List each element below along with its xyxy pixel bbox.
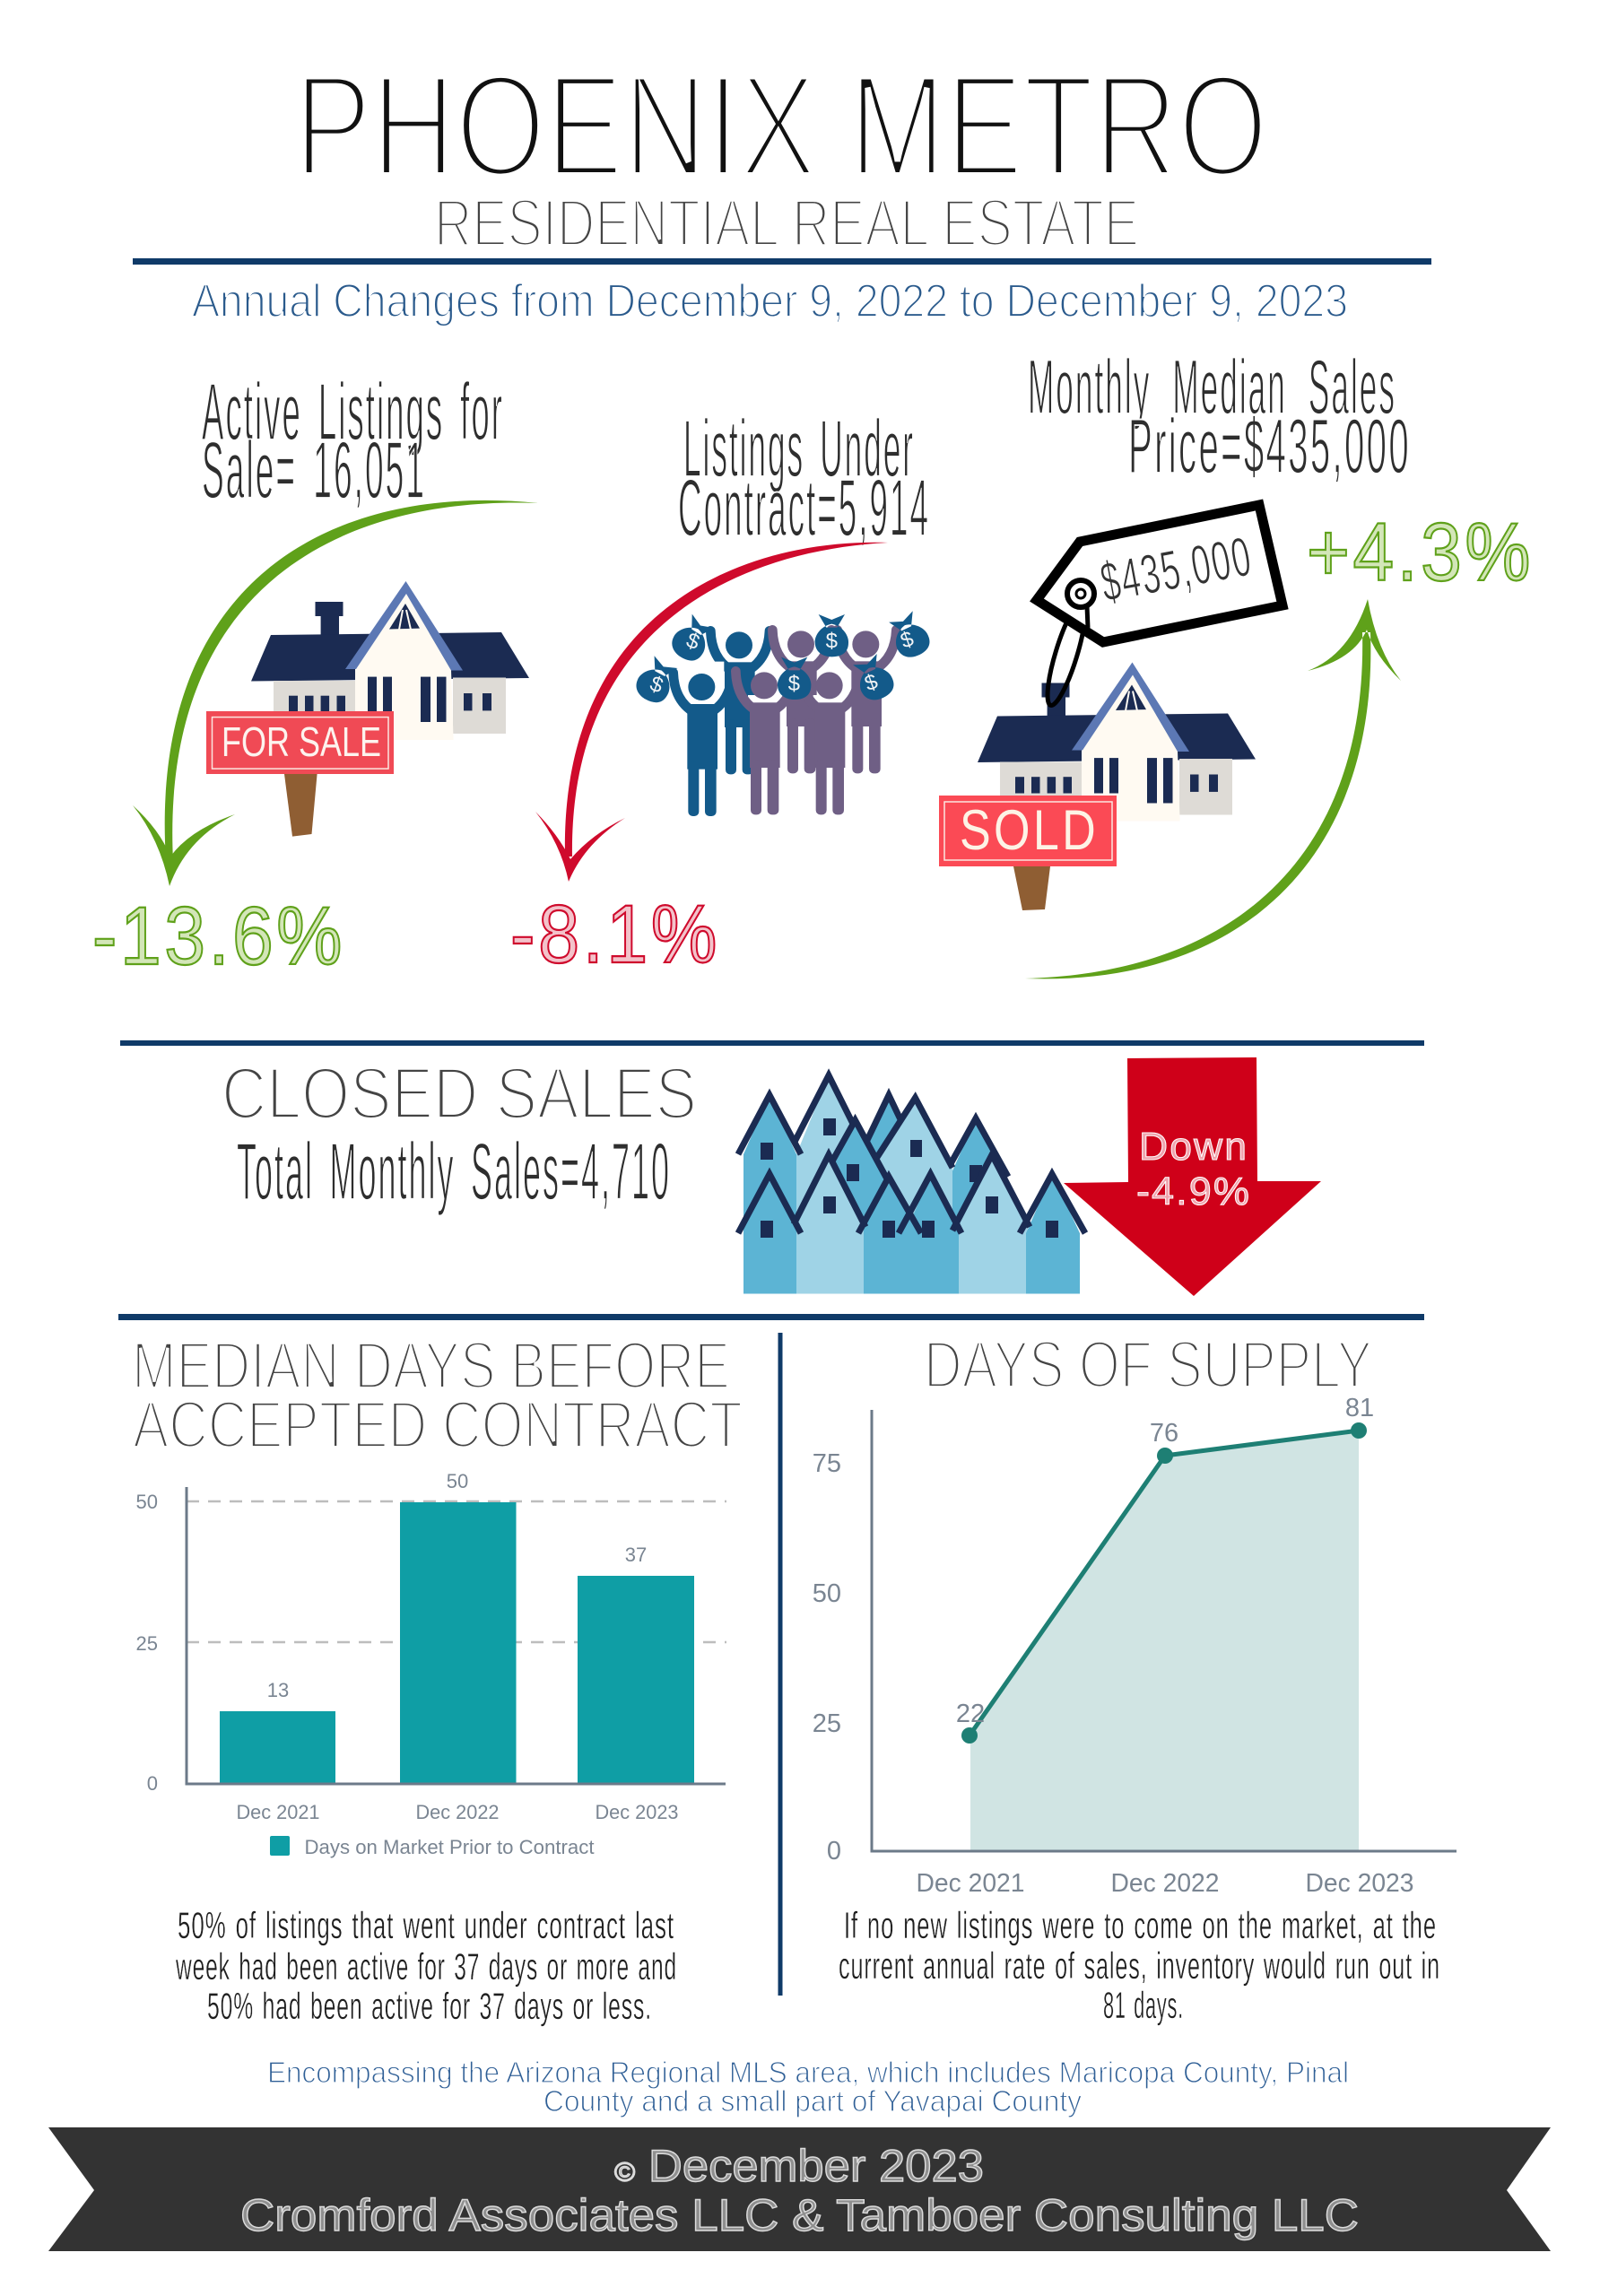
icon: house for sale [206,581,529,837]
icon: price tag: $435,000 [1096,526,1257,614]
title: PHOENIX METRO [294,45,1268,207]
closed sales heading: CLOSED SALES [222,1053,697,1135]
date range subheading: Annual Changes from December 9, 2022 to December 9, 2023 [192,275,1348,327]
bar chart: 25 [136,1632,158,1655]
arrow: green curved up [1025,599,1401,978]
icon: people with money bags: $ [788,672,800,696]
days of supply explanation: 81 days. [1103,1984,1184,2026]
median days heading [132,1328,743,1462]
bar chart: 50 [136,1491,158,1513]
panel: closed sales [222,1053,1321,1296]
median days explanation [175,1904,677,2027]
icon: people with money bags: $ [683,628,702,655]
line chart: 81 [1345,1394,1374,1422]
footer banner: Cromford Associates LLC & Tamboer Consulting LLC [240,2190,1359,2240]
median price change: +4.3% [1307,507,1534,598]
active listings label [202,368,504,516]
arrow: green curved down [133,500,538,886]
median price label [1028,344,1411,490]
coverage note: Encompassing the Arizona Regional MLS area, which includes Maricopa County, Pinal [267,2056,1349,2089]
panel: median sales price [939,344,1534,978]
median days heading: ACCEPTED CONTRACT [133,1387,743,1462]
coverage note [267,2056,1349,2118]
icon: people with money bags [631,610,934,816]
arrow: red curved down [535,543,888,882]
text: Contract=5,914 [678,464,930,553]
active listings change: -13.6% [92,891,345,982]
bar chart: Dec 2023 [596,1801,678,1823]
active listings label: Sale= 16,051 [202,426,426,516]
bar chart: Dec 2022 [416,1801,499,1823]
icon: price tag [1037,505,1283,709]
median days explanation: 50% had been active for 37 days or less. [207,1985,652,2027]
coverage note: County and a small part of Yavapai County [543,2084,1082,2118]
icon: people with money bags: $ [647,672,666,699]
panel: median days before accepted contract [132,1328,743,2027]
text: Active Listings for [202,368,504,457]
icon: people with money bags: $ [862,669,881,696]
panel: active listings [92,368,538,982]
icon: row of houses [738,1075,1085,1293]
line chart: 75 [813,1449,841,1478]
arrow: red down with change: Down [1139,1125,1248,1169]
median days explanation: week had been active for 37 days or more and [175,1945,677,1987]
panel: closed sales: Total Monthly Sales=4,710 [237,1127,671,1217]
footer banner: © December 2023 [614,2141,984,2191]
bar chart: 37 [625,1544,647,1566]
bar chart: 13 [267,1679,289,1701]
footer banner [48,2127,1551,2251]
line chart: 50 [813,1579,841,1608]
icon: people with money bags: $ [898,627,917,654]
bar chart: Dec 2021 [237,1801,319,1823]
subtitle: RESIDENTIAL REAL ESTATE [434,186,1139,260]
arrow: red down with change: -4.9% [1136,1170,1251,1213]
icon: sold house [978,662,1256,822]
line chart: 0 [827,1837,841,1866]
legend: Days on Market Prior to Contract [305,1836,594,1858]
under contract change: -8.1% [510,889,720,980]
days of supply explanation [839,1904,1440,2026]
bar chart [136,1470,726,1858]
panel: days of supply [813,1327,1457,2026]
days of supply heading: DAYS OF SUPPLY [924,1327,1372,1402]
line chart: 76 [1150,1419,1178,1448]
line chart [813,1394,1457,1898]
panel: listings under contract [510,404,934,980]
line chart: 22 [956,1700,985,1728]
under contract label [678,404,930,553]
text: Listings Under [683,404,915,494]
bar chart: 0 [147,1772,158,1795]
line chart: Dec 2023 [1306,1869,1413,1898]
arrow: red down with change [1064,1057,1321,1296]
line chart: 25 [813,1709,841,1738]
line chart: Dec 2021 [917,1869,1024,1898]
median days heading: MEDIAN DAYS BEFORE [132,1328,730,1403]
bar chart: 50 [447,1470,468,1492]
icon: people with money bags: $ [826,629,838,653]
median days explanation: 50% of listings that went under contract last [178,1904,674,1946]
icon: sold sign [939,796,1117,910]
icon: house for sale: FOR SALE [222,718,381,765]
line chart: Dec 2022 [1110,1869,1220,1898]
icon: sold sign: SOLD [960,799,1099,862]
